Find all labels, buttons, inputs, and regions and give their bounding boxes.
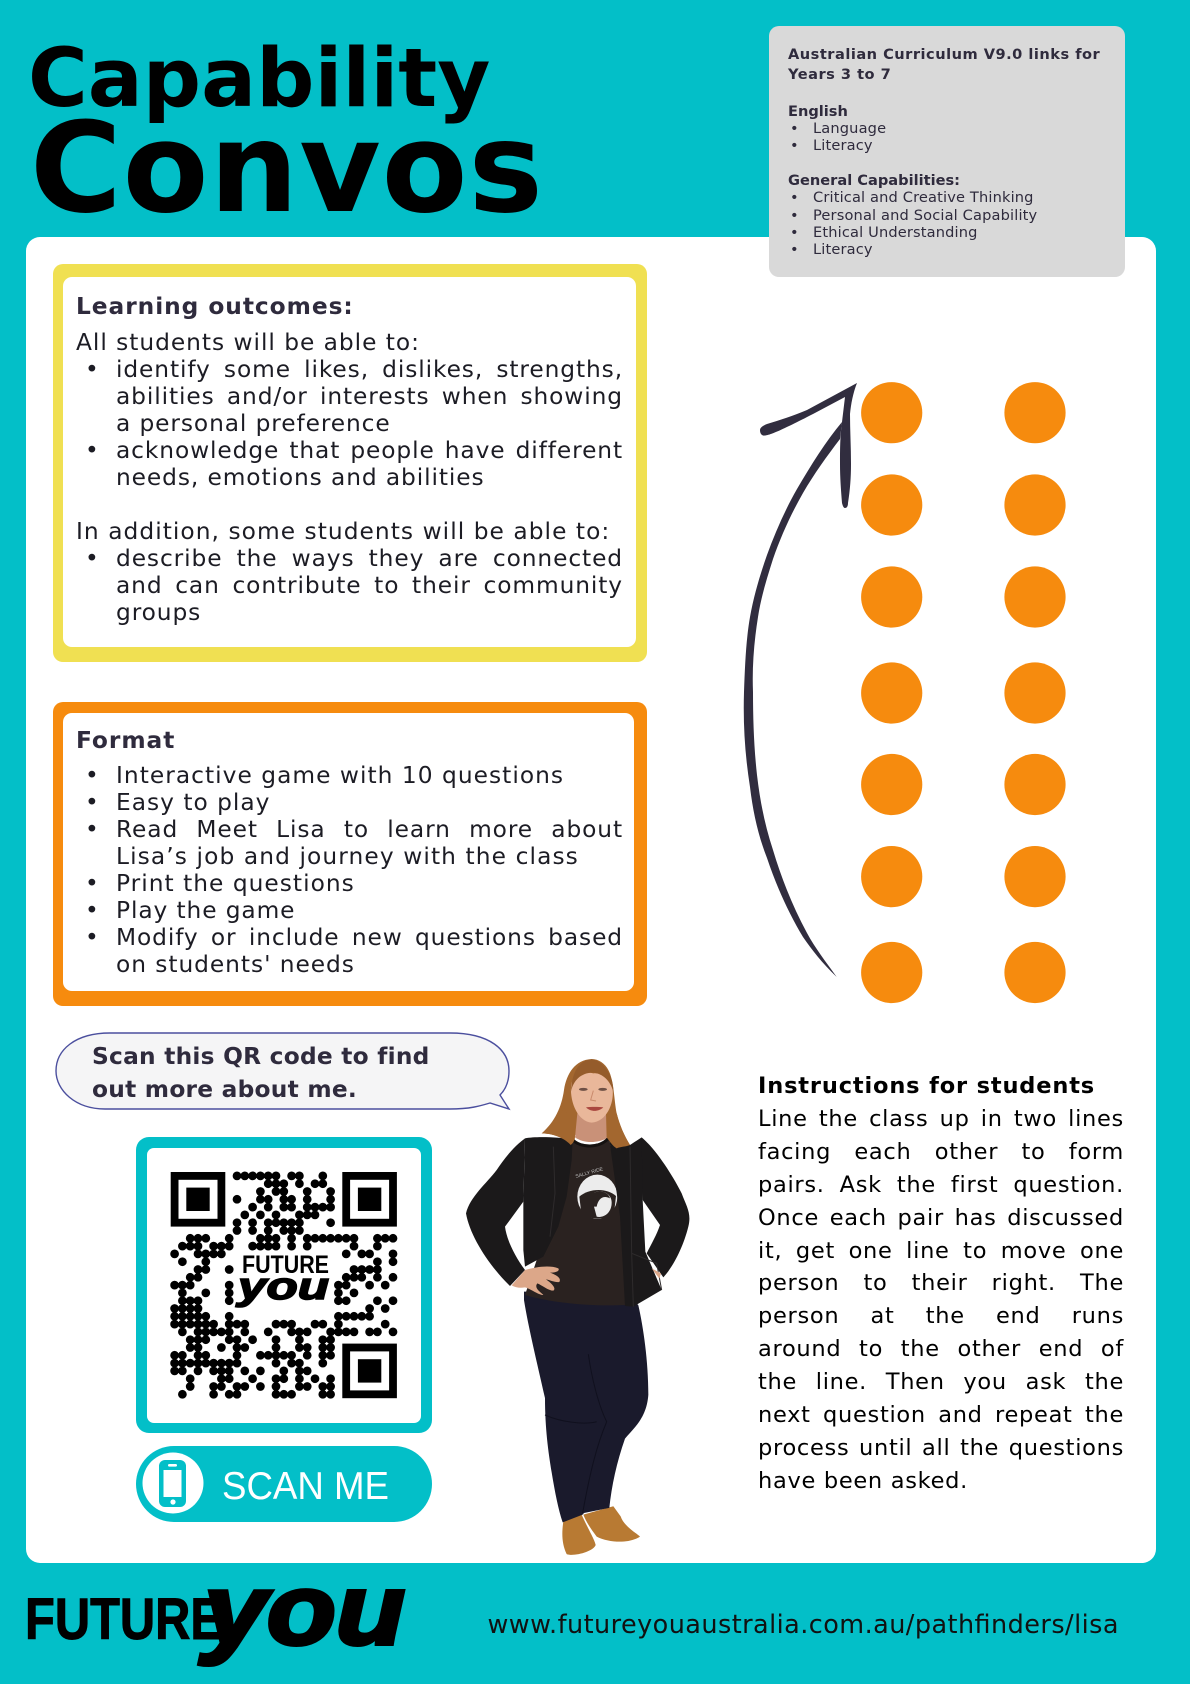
diagram: two lines of students <box>861 382 1066 1004</box>
General Capabilities links: Ethical Understanding <box>813 224 978 241</box>
Future You logo: FUTURE <box>25 1587 223 1652</box>
QR centre logo <box>235 1251 329 1308</box>
learning outcomes text <box>76 329 623 626</box>
instructions body: pairs. Ask the first question. <box>758 1172 1124 1198</box>
format bullets: Print the questions <box>116 870 355 897</box>
illustration: Lisa <box>466 1059 690 1555</box>
format heading: Format <box>76 727 175 754</box>
bullets: all students: abilities and/or interests when showing <box>116 383 623 410</box>
format bullets: on students' needs <box>116 951 355 978</box>
bullets: all students <box>88 356 623 491</box>
format bullets: Play the game <box>116 897 295 924</box>
hair <box>542 1059 630 1148</box>
instructions body: it, get one line to move one <box>758 1238 1124 1264</box>
QR code frame <box>136 1137 432 1433</box>
curriculum heading: Years 3 to 7 <box>788 66 891 83</box>
bullets: some students: groups <box>116 599 201 626</box>
panel: learning outcomes <box>53 264 647 662</box>
General Capabilities links: General Capabilities: <box>788 172 960 189</box>
intro: all students: All students will be able to: <box>76 329 420 356</box>
bubble text <box>92 1043 430 1103</box>
t-shirt print <box>575 1166 617 1219</box>
format bullets: Modify or include new questions based <box>116 924 623 951</box>
General Capabilities links: Personal and Social Capability <box>813 207 1037 224</box>
English links: Language <box>813 120 886 137</box>
instructions body: person to their right. The <box>758 1270 1124 1296</box>
format bullets <box>88 762 623 978</box>
t-shirt <box>525 1137 625 1305</box>
format bullets: Interactive game with 10 questions <box>116 762 564 788</box>
instructions body: next question and repeat the <box>758 1402 1124 1428</box>
bullets: all students: identify some likes, dislikes, strengths, <box>116 356 623 383</box>
neck <box>575 1113 607 1142</box>
QR inner <box>147 1148 421 1423</box>
lower body <box>524 1292 648 1555</box>
instructions body: Line the class up in two lines <box>758 1106 1124 1132</box>
bullets: all students: acknowledge that people have different <box>116 437 623 464</box>
General Capabilities links: Literacy <box>813 241 873 258</box>
title <box>28 31 544 241</box>
bubble text: out more about me. <box>92 1076 357 1103</box>
icon: phone <box>159 1460 186 1507</box>
QR data modules <box>175 1176 393 1394</box>
jacket lines <box>550 1147 662 1307</box>
QR centre logo: FUTURE <box>242 1251 329 1279</box>
bullets: some students: and can contribute to their community <box>116 572 623 599</box>
right hand <box>652 1268 661 1279</box>
bullets: some students: describe the ways they are connected <box>116 545 623 572</box>
instructions body: process until all the questions <box>758 1435 1124 1461</box>
scan me button <box>136 1446 432 1522</box>
t-shirt print: SALLY RIDE <box>575 1166 605 1180</box>
line two dots <box>1004 382 1066 1003</box>
bullets: all students: needs, emotions and abilities <box>116 464 485 491</box>
instructions body: person at the end runs <box>758 1303 1124 1329</box>
instructions body: Once each pair has discussed <box>758 1205 1124 1231</box>
jacket <box>466 1137 689 1307</box>
title line: Convos: Convos <box>30 96 544 241</box>
instructions body <box>758 1106 1124 1494</box>
learning outcomes heading: Learning outcomes: <box>76 293 354 320</box>
face <box>571 1059 613 1123</box>
curriculum heading: Australian Curriculum V9.0 links for <box>788 46 1100 63</box>
instructions heading: Instructions for students <box>758 1073 1095 1099</box>
bubble shape <box>55 1032 510 1110</box>
format bullets: Read Meet Lisa to learn more about <box>116 816 623 843</box>
format bullets: Lisa’s job and journey with the class <box>116 843 579 870</box>
learning outcomes inner box <box>62 277 636 647</box>
instructions body: around to the other end of <box>758 1336 1124 1362</box>
format bullets: Easy to play <box>116 789 270 816</box>
bubble text: Scan this QR code to find <box>92 1043 430 1070</box>
panel: format <box>53 702 647 1006</box>
scan me label: SCAN ME <box>222 1465 389 1508</box>
QR finder patterns <box>175 1176 393 1394</box>
format inner box <box>62 713 634 991</box>
intro: some students: In addition, some students will be able to: <box>76 518 610 545</box>
General Capabilities links <box>788 172 1037 258</box>
QR code <box>170 1172 398 1399</box>
bullets: some students <box>88 545 623 626</box>
line one dots <box>861 382 922 1003</box>
bullets: all students: a personal preference <box>116 410 391 437</box>
speech bubble <box>55 1032 510 1110</box>
instructions body: facing each other to form <box>758 1139 1124 1165</box>
hair locks over shoulders <box>542 1107 630 1148</box>
QR centre logo: you <box>235 1266 329 1308</box>
English links: Literacy <box>813 137 873 154</box>
website URL: www.futureyouaustralia.com.au/pathfinders/lisa <box>488 1610 1118 1640</box>
title line: Capability: Capability <box>28 31 490 126</box>
General Capabilities links: Critical and Creative Thinking <box>813 189 1034 206</box>
English links: English <box>788 102 848 120</box>
instructions body: the line. Then you ask the <box>758 1369 1124 1395</box>
t-shirt collar <box>572 1138 608 1146</box>
curriculum heading <box>788 46 1100 83</box>
trouser seams <box>545 1354 607 1513</box>
upper body <box>466 1059 689 1307</box>
white content card <box>26 237 1156 1563</box>
instructions <box>758 1073 1124 1494</box>
trousers <box>524 1292 648 1522</box>
Future You logo <box>25 1570 406 1667</box>
instructions body: have been asked. <box>758 1468 968 1494</box>
left hand <box>512 1267 560 1295</box>
English links <box>788 102 886 154</box>
panel: curriculum links <box>769 26 1125 277</box>
arrow <box>744 383 857 977</box>
shoes <box>562 1506 640 1555</box>
